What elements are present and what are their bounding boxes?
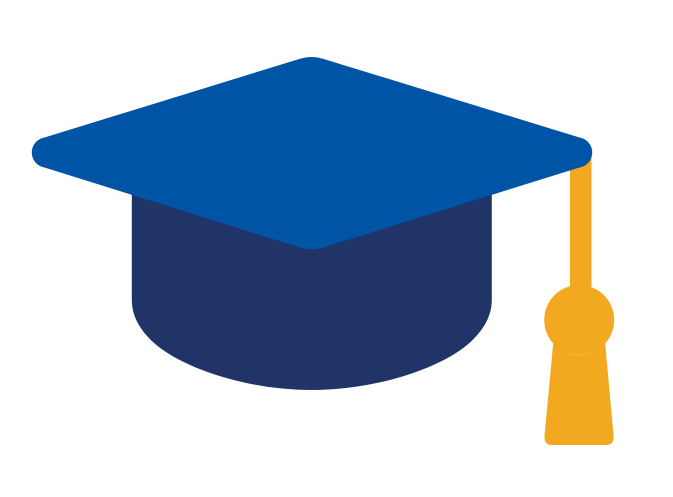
mortarboard: [32, 57, 592, 249]
tassel cord: [570, 150, 592, 295]
cap base: [132, 190, 492, 390]
tassel knot: [544, 285, 614, 355]
tassel skirt: [544, 335, 614, 445]
